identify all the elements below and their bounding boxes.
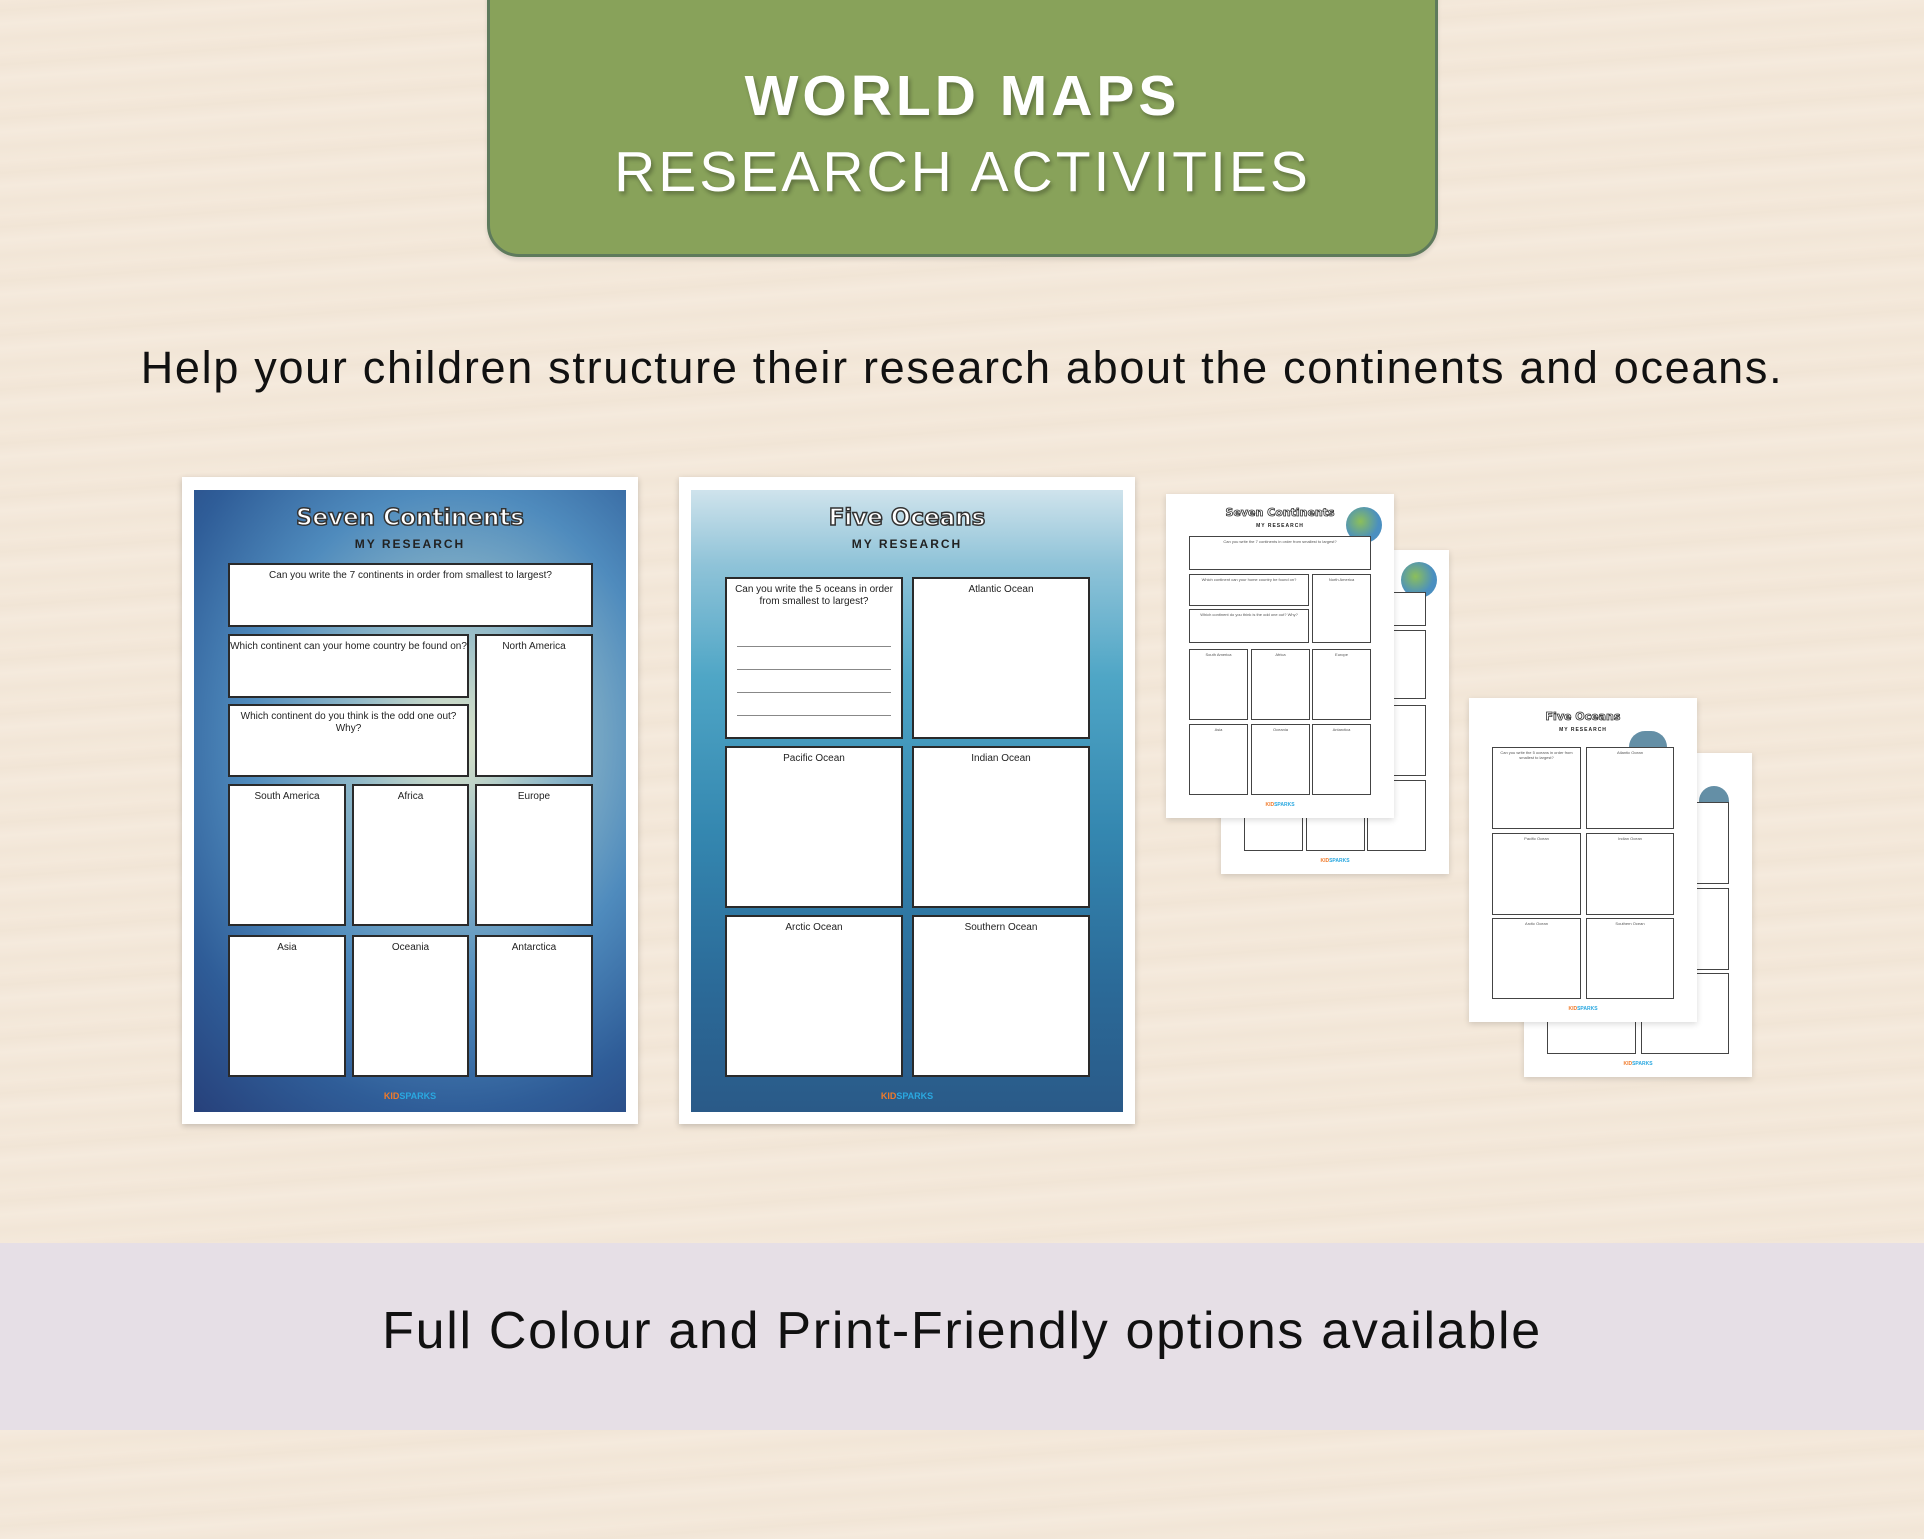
box: order question: Can you write the 5 oceans in order <box>735 584 893 595</box>
sheet: front continents: Seven Continents <box>1225 506 1335 519</box>
sheet: back oceans <box>1524 753 1752 1077</box>
box: arctic ocean <box>725 915 903 1077</box>
panel: print-friendly continents sheets <box>1164 494 1452 878</box>
sheet: front continents <box>1166 494 1394 818</box>
sheet: front oceans: Pacific Ocean <box>1524 836 1549 841</box>
sheet: front continents: North America <box>1329 577 1354 582</box>
sheet: front oceans <box>1469 698 1697 1022</box>
box: africa: Africa <box>398 791 423 802</box>
sheet: front continents: Africa <box>1275 652 1286 657</box>
box: atlantic ocean: Atlantic Ocean <box>968 584 1034 595</box>
footer text: Full Colour and Print-Friendly options available <box>382 1302 1542 1360</box>
box: south america <box>228 784 346 926</box>
heading: seven continents: Seven Continents <box>296 505 524 531</box>
sheet: front oceans: Indian Ocean <box>1618 836 1642 841</box>
box: indian ocean <box>912 746 1090 908</box>
sheet: front oceans: Southern Ocean <box>1615 921 1645 926</box>
box: oceania <box>352 935 469 1077</box>
box: south america: South America <box>254 791 320 802</box>
box: europe <box>475 784 593 926</box>
box: oceania: Oceania <box>392 942 429 953</box>
box: pacific ocean: Pacific Ocean <box>783 753 845 764</box>
box: home country: Which continent can your home country be found on? <box>230 641 467 652</box>
box: asia <box>228 935 346 1077</box>
subtitle: research activities: RESEARCH ACTIVITIES <box>614 140 1311 204</box>
sheet: front oceans: Atlantic Ocean <box>1617 750 1643 755</box>
box: southern ocean: Southern Ocean <box>965 922 1037 933</box>
box: order question <box>228 563 593 627</box>
sheet: front oceans: MY RESEARCH <box>1559 727 1607 733</box>
sheet: front continents: KIDSPARKS <box>1265 802 1295 808</box>
box: odd one out <box>228 704 469 777</box>
box: order question <box>725 577 903 739</box>
sheet: front continents: South America <box>1205 652 1232 657</box>
box: asia: Asia <box>277 942 297 953</box>
box: odd one out: Which continent do you think is the odd one out? Why? <box>241 711 456 734</box>
box: home country <box>228 634 469 698</box>
heading: my research: MY RESEARCH <box>355 537 465 551</box>
box: atlantic ocean <box>912 577 1090 739</box>
panel: print-friendly oceans sheets <box>1466 698 1754 1082</box>
box: north america: North America <box>502 641 566 652</box>
title banner <box>487 0 1438 257</box>
sheet: front continents: MY RESEARCH <box>1256 523 1304 529</box>
box: europe: Europe <box>518 791 550 802</box>
sheet: front oceans: Can you write the 5 oceans in order from smallest to largest? <box>1500 750 1573 760</box>
icon: globe <box>1346 507 1382 543</box>
title: world maps: WORLD MAPS <box>745 64 1180 128</box>
box: north america <box>475 634 593 777</box>
box: arctic ocean: Arctic Ocean <box>785 922 843 933</box>
box: antarctica <box>475 935 593 1077</box>
sheet: front oceans: KIDSPARKS <box>1568 1006 1598 1012</box>
box: order question: Can you write the 7 continents in order from smallest to largest? <box>269 570 552 581</box>
sheet: back continents: KIDSPARKS <box>1320 858 1350 864</box>
logo: KIDSPARKS <box>384 1091 436 1101</box>
sheet: front continents: Which continent do you think is the odd one out? Why? <box>1200 612 1298 617</box>
footer band <box>0 1243 1924 1430</box>
box: southern ocean <box>912 915 1090 1077</box>
box: indian ocean: Indian Ocean <box>971 753 1031 764</box>
sheet: front continents: Asia <box>1215 727 1222 732</box>
panel: five oceans worksheet <box>679 477 1135 1124</box>
sheet: front continents: Antarctica <box>1333 727 1350 732</box>
icon: wave <box>1629 731 1667 747</box>
sheet: front oceans: Arctic Ocean <box>1525 921 1548 926</box>
box: order question: from smallest to largest? <box>760 596 868 607</box>
sheet: front oceans: Five Oceans <box>1546 710 1620 723</box>
sheet: front continents: Oceania <box>1273 727 1288 732</box>
box: africa <box>352 784 469 926</box>
box: antarctica: Antarctica <box>512 942 556 953</box>
sheet: front continents: Which continent can your home country be found on? <box>1202 577 1296 582</box>
sheet: back continents <box>1221 550 1449 874</box>
sheet: back oceans: KIDSPARKS <box>1623 1061 1653 1067</box>
box: pacific ocean <box>725 746 903 908</box>
description text: Help your children structure their research about the continents and oceans. <box>141 342 1783 393</box>
heading: my research: MY RESEARCH <box>852 537 962 551</box>
sheet: front continents: Europe <box>1335 652 1348 657</box>
panel: seven continents worksheet <box>182 477 638 1124</box>
logo: KIDSPARKS <box>881 1091 933 1101</box>
sheet: front continents: Can you write the 7 continents in order from smallest to largest? <box>1223 539 1337 544</box>
heading: five oceans: Five Oceans <box>829 505 985 531</box>
